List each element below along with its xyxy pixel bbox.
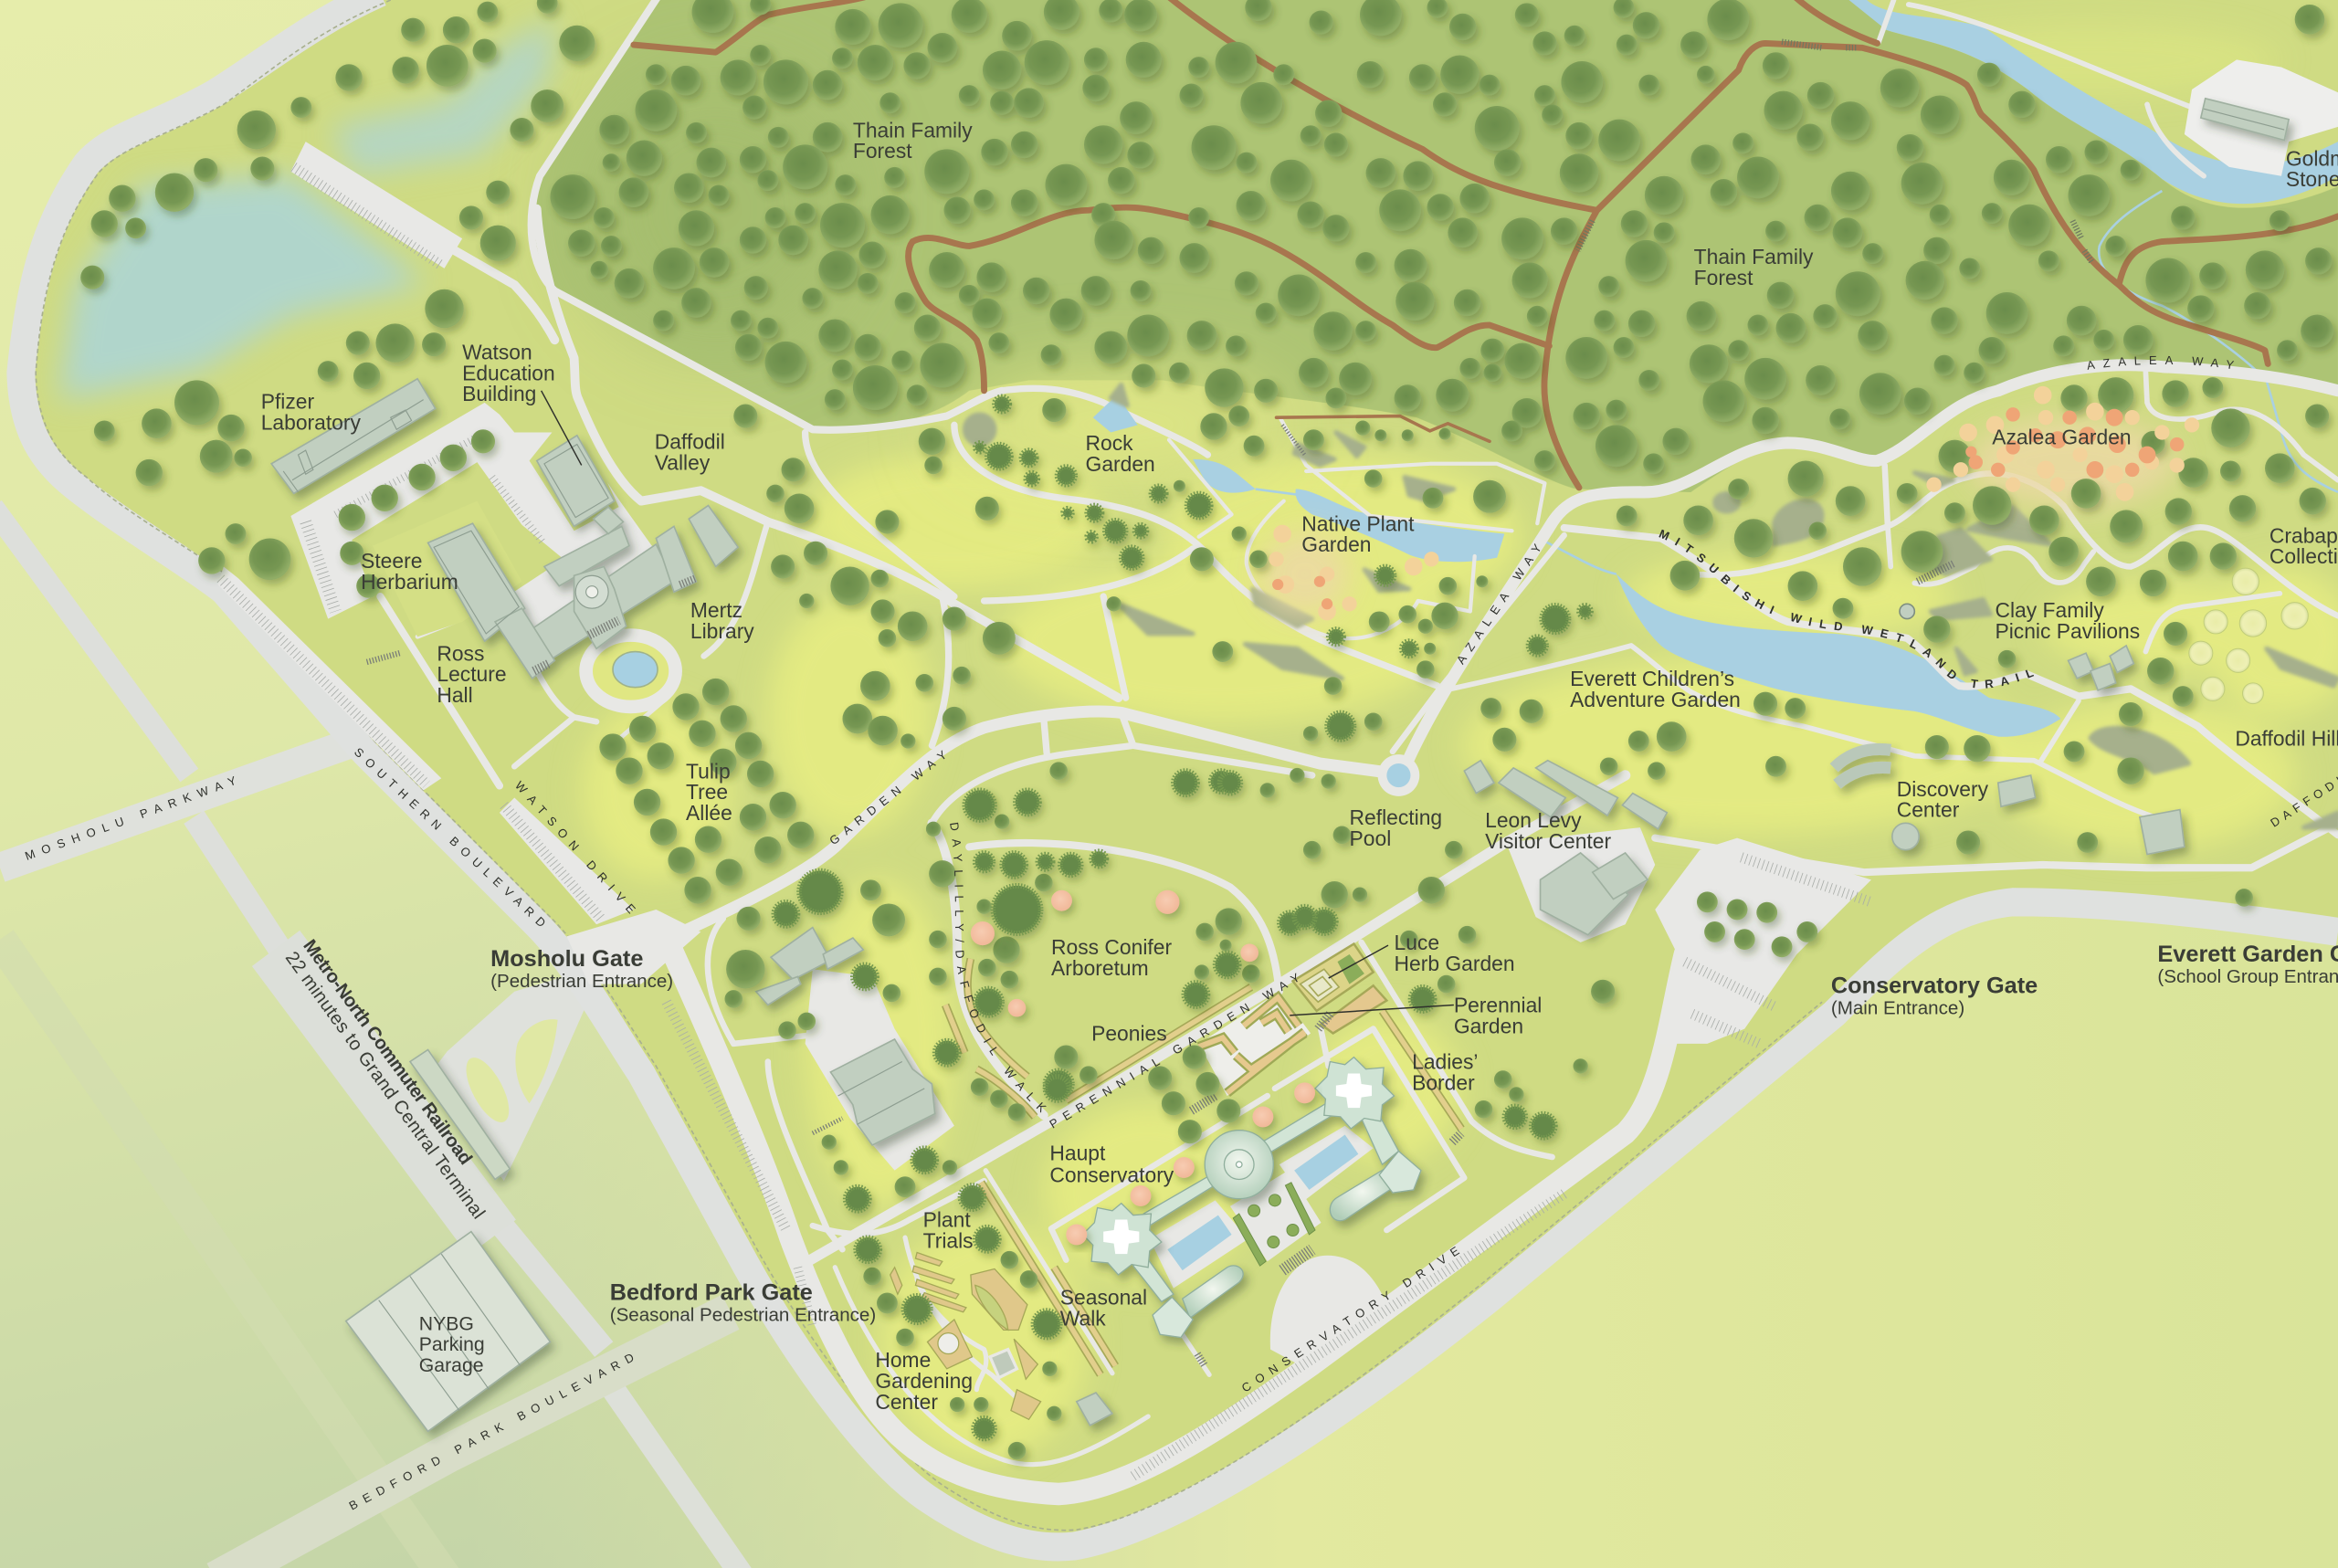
label: Perennial Garden: Perennial (1454, 994, 1542, 1017)
small pond (1193, 459, 1256, 493)
bed fills (1199, 997, 1305, 1093)
label: Daffodil Hill: Daffodil Hill (2235, 726, 2338, 750)
Ross Lecture Hall (495, 608, 554, 679)
NYBG Parking Garage (346, 1232, 550, 1431)
label: Bedford Park Boulevard: BEDFORD PARK BOULEVARD (347, 1351, 637, 1513)
label: Reflecting Pool: Reflecting (1350, 805, 1442, 829)
label: Ross Conifer Arboretum: Ross Conifer (1051, 935, 1172, 959)
label: Native Plant Garden: Native Plant (1301, 511, 1414, 535)
light lawns (582, 23, 2338, 1461)
Lower building complex (830, 1039, 935, 1145)
label: Conservatory Drive: CONSERVATORY DRIVE (1239, 1244, 1462, 1394)
label: Thain Family Forest east: Thain Family (1694, 245, 1813, 268)
forest trails (634, 0, 2338, 488)
label: Steere Herbarium: Steere (361, 549, 422, 573)
label: Clay Family Picnic Pavilions: Picnic Pavilions (1995, 619, 2140, 643)
SW pavilion (1082, 1204, 1162, 1275)
label: Mosholu Gate: Mosholu Gate (490, 946, 643, 972)
label: Discovery Center: Center (1897, 798, 1960, 822)
E pavilion (1379, 1151, 1421, 1193)
Rock Garden pool (1093, 394, 1138, 433)
label: Pfizer Laboratory: Laboratory (261, 410, 362, 434)
label: Seasonal Walk: Walk (1060, 1306, 1106, 1330)
Perennial Garden Way (806, 775, 1626, 1263)
plaza: Haupt Conservatory (1150, 1126, 1374, 1289)
label: Daylilly Daffodil Walk: DAYLILLY/DAFFODIL WALK (950, 822, 1047, 1112)
Watson Drive and Conservatory Drive (664, 879, 1715, 1494)
conservatory courtyard beds (1233, 1183, 1315, 1266)
garden beds (945, 959, 1461, 1374)
label: Conservatory Gate: (Main Entrance) (1831, 997, 1964, 1018)
Azalea Garden blossoms (1270, 388, 2198, 619)
perimeter fence (36, 0, 1822, 1531)
Steere Herbarium (428, 523, 525, 641)
Discovery west pavilion (2140, 810, 2185, 855)
plaza: Goldman Stone Mill (2185, 59, 2338, 176)
Discovery rotunda (1892, 823, 1919, 850)
label: NYBG Parking Garage: NYBG (419, 1313, 474, 1334)
label: Bedford Park Gate: Bedford Park Gate (610, 1280, 813, 1306)
label: Perennial Garden Way: PERENNIAL GARDEN WAY (1047, 970, 1302, 1131)
label: Watson Drive: WATSON DRIVE (512, 778, 638, 916)
Azalea side (1617, 506, 1638, 526)
SW pavilion cross (1103, 1220, 1139, 1254)
NE pavilion cross (1336, 1074, 1372, 1108)
crescent lawn (975, 1285, 1008, 1330)
Pfizer Laboratory (271, 379, 436, 493)
surrounding streets and rail line (0, 507, 745, 1568)
label: Mertz Library: Library (690, 619, 754, 643)
Mitsubishi trail (1564, 528, 2338, 835)
lawn: Herbarium island (373, 501, 521, 637)
label: Mosholu Parkway: MOSHOLU PARKWAY (23, 773, 238, 863)
label: Plant Trials: Plant (923, 1208, 971, 1232)
label: Tulip Tree Allee: Tulip (686, 759, 731, 783)
Native Plant Garden pond (1296, 489, 1504, 562)
Home Gardening Center building (990, 1350, 1016, 1378)
Thain Family Forest ground (532, 0, 2338, 492)
label: Thain Family Forest east: Forest (1694, 266, 1754, 289)
plaza: reflecting pool ring (1378, 754, 1419, 796)
label: Ross Lecture Hall: Hall (437, 683, 473, 707)
Conservatory wings (1133, 1102, 1398, 1301)
Discovery annex (1998, 775, 2036, 806)
Leon Levy Center buildings (1464, 761, 1494, 794)
label: Metro-North Commuter Railroad: Metro-North Commuter Railroad (299, 936, 476, 1169)
Goldman access road (1879, 0, 2204, 176)
Luce Herb Garden (1293, 944, 1374, 1011)
azalea sandy beds (1260, 417, 2177, 616)
leader lines (542, 391, 1454, 1016)
East arm (1330, 1167, 1395, 1221)
label: Mertz Library: Mertz (690, 598, 742, 622)
bed outlines (945, 959, 1461, 1374)
parking lots (217, 59, 2338, 1372)
label: Luce Herb Garden: Herb Garden (1395, 952, 1515, 975)
river and lakes (1193, 0, 2338, 737)
Clay Family Pavilions (2068, 653, 2093, 679)
label: Ross Lecture Hall: Lecture (437, 662, 507, 686)
label: Luce Herb Garden: Luce (1395, 931, 1439, 954)
label: Everett Children's Adventure Garden: Adventure Garden (1570, 688, 1741, 711)
Upper wing (544, 526, 629, 586)
label: Reflecting Pool: Pool (1350, 826, 1391, 850)
Perennial Garden beds (1199, 944, 1386, 1096)
label: Peonies: Peonies (1091, 1022, 1167, 1046)
Haupt Conservatory (1082, 1058, 1421, 1338)
label: NYBG Parking Garage: Parking (419, 1334, 485, 1355)
label: Perennial Garden: Garden (1454, 1014, 1523, 1037)
rock outcrops (964, 384, 2338, 827)
label: Ladies' Border: Ladies’ (1412, 1050, 1479, 1074)
East perennial bed (1322, 985, 1386, 1033)
Watson Education Building (537, 436, 615, 526)
forest darker shading and fade (582, 75, 1282, 469)
garage bays and building detail lines (283, 109, 2284, 1411)
Tulip Tree Allee rows (702, 679, 729, 705)
bed fills (945, 959, 1461, 1374)
place labels (261, 118, 2338, 1414)
south lawn (860, 879, 881, 900)
plaza: Peony path (806, 969, 954, 1171)
picnic shelter icon (1900, 604, 1914, 619)
Central dome (1205, 1131, 1273, 1199)
Plant Trials and Home Gardening beds (890, 1252, 1041, 1419)
label: Thain Family Forest west: Thain Family (853, 118, 973, 142)
Mertz connector (594, 507, 623, 534)
Reflecting Pool (1386, 763, 1410, 787)
Metro-North station (410, 1049, 510, 1179)
forest trees (550, 0, 2333, 474)
library dome (574, 566, 627, 648)
label: Rock Garden: Garden (1086, 452, 1155, 476)
Luce knots (1337, 954, 1364, 984)
parking: north strip (290, 142, 462, 268)
Garden Way (634, 711, 1386, 954)
label: Bedford Park Gate: (Seasonal Pedestrian Entrance) (610, 1305, 876, 1326)
NE pavilion (1315, 1058, 1395, 1129)
label: Ross Lecture Hall: Ross (437, 641, 484, 665)
parking: Conservatory Gate lot (1655, 838, 1871, 1044)
label: Conservatory Gate: Conservatory Gate (1831, 973, 2038, 998)
label: Watson Education Building: Education (462, 361, 555, 384)
library fountain (613, 652, 658, 688)
label: Southern Boulevard: SOUTHERN BOULEVARD (352, 745, 548, 930)
label: Steere Herbarium: Herbarium (361, 570, 458, 594)
label: Home Gardening Center: Gardening (875, 1369, 973, 1393)
label: Mitsubishi Wild Wetland Trail: MITSUBISHI WILD WETLAND TRAIL (1659, 530, 2034, 689)
station access loop (428, 969, 589, 1181)
parking: Watson Drive strip (500, 798, 634, 924)
fan garden wheel (938, 1333, 959, 1353)
label: Tulip Tree Allee: Allée (686, 801, 732, 825)
label: Haupt Conservatory: Conservatory (1049, 1163, 1174, 1187)
north pavilion (689, 506, 738, 566)
label: Rock Garden: Rock (1086, 431, 1133, 455)
Discovery Center arcs (1834, 749, 1890, 784)
road labels (6, 316, 2338, 1550)
Azalea Way (1402, 365, 2338, 775)
plaza: Mosholu Gate (566, 910, 700, 984)
S pavilion (1153, 1297, 1193, 1338)
South lower wing (756, 976, 801, 1005)
Goldman Stone Mill (2201, 99, 2289, 141)
plaza: Leon Levy Visitor Center (1506, 827, 1655, 942)
label: Plant Trials: Trials (923, 1229, 974, 1253)
conifers (774, 396, 1591, 1439)
Native and Rock Garden lawn (1042, 398, 1066, 422)
label: Clay Family Picnic Pavilions: Clay Family (1995, 598, 2104, 622)
parking: Southern Boulevard strip (217, 566, 441, 790)
trail crossings (1577, 42, 2092, 262)
greenhouse block (1077, 1393, 1112, 1426)
label: Pfizer Laboratory: Pfizer (261, 389, 314, 413)
bed outlines (1199, 997, 1305, 1093)
label: Everett Children's Adventure Garden: Everett Children’s (1570, 667, 1734, 690)
peach flowering trees (971, 890, 1315, 1245)
label: Home Gardening Center: Home (875, 1348, 931, 1372)
label: Haupt Conservatory: Haupt (1049, 1141, 1105, 1164)
label: Watson Education Building: Watson (462, 341, 532, 364)
Main wing (525, 544, 674, 664)
label: Discovery Center: Discovery (1897, 777, 1988, 801)
wetlands top left (59, 18, 554, 400)
label: Garden Way: GARDEN WAY (827, 748, 950, 847)
Twin Lakes wetland lake (1617, 574, 2060, 737)
label: Seasonal Walk: Seasonal (1060, 1286, 1147, 1310)
label: Tulip Tree Allee: Tree (686, 780, 728, 804)
label: Watson Education Building: Building (462, 382, 536, 405)
buildings (271, 99, 2289, 1431)
Mertz Library (656, 526, 696, 592)
Bronx River (1848, 0, 2338, 204)
label: Azalea Way: AZALEA WAY (2088, 356, 2234, 370)
plaza: library fountain ring (586, 636, 676, 707)
label: Azalea Garden: Azalea Garden (1992, 426, 2132, 449)
main paths and roads (380, 0, 2338, 1494)
label: Thain Family Forest west: Forest (853, 139, 912, 163)
parking stripes (221, 167, 1871, 1476)
label: Azalea Way vertical: AZALEA WAY (1454, 542, 1544, 667)
steps (367, 425, 1954, 1366)
parking: Pfizer and Watson lot (290, 403, 656, 641)
South upper building (771, 928, 830, 980)
South arm (1183, 1266, 1243, 1318)
Forest edge road (532, 0, 1002, 430)
pale crabapple trees (2189, 568, 2308, 704)
label: Ladies' Border: Border (1412, 1071, 1475, 1095)
Conservatory pool west (1167, 1215, 1232, 1270)
label: NYBG Parking Garage: Garage (419, 1355, 484, 1376)
label: Native Plant Garden: Garden (1301, 532, 1372, 556)
Conservatory pool east (1294, 1134, 1358, 1190)
plaza: forecourt (1270, 1256, 1390, 1372)
water features in plazas (613, 394, 1410, 1270)
label: Daffodil Valley: Daffodil (655, 429, 725, 453)
Luce inner beds (1301, 969, 1339, 1002)
streams (1256, 191, 2338, 574)
lawn: Watson building island (530, 424, 619, 531)
label: Daffodil Valley: Valley (655, 450, 711, 474)
label: Leon Levy Visitor Center: Visitor Center (1485, 829, 1611, 853)
courtyard paving (1199, 992, 1311, 1096)
label: 22 minutes to Grand Central Terminal: 22 minutes to Grand Central Terminal (281, 948, 489, 1223)
label: Ross Conifer Arboretum: Arboretum (1051, 956, 1149, 980)
label: Leon Levy Visitor Center: Leon Levy (1485, 808, 1582, 832)
crescent bed (971, 1268, 1027, 1330)
South bar (823, 938, 863, 969)
label: Home Gardening Center: Center (875, 1390, 938, 1414)
label: Mosholu Gate: (Pedestrian Entrance) (490, 971, 673, 992)
